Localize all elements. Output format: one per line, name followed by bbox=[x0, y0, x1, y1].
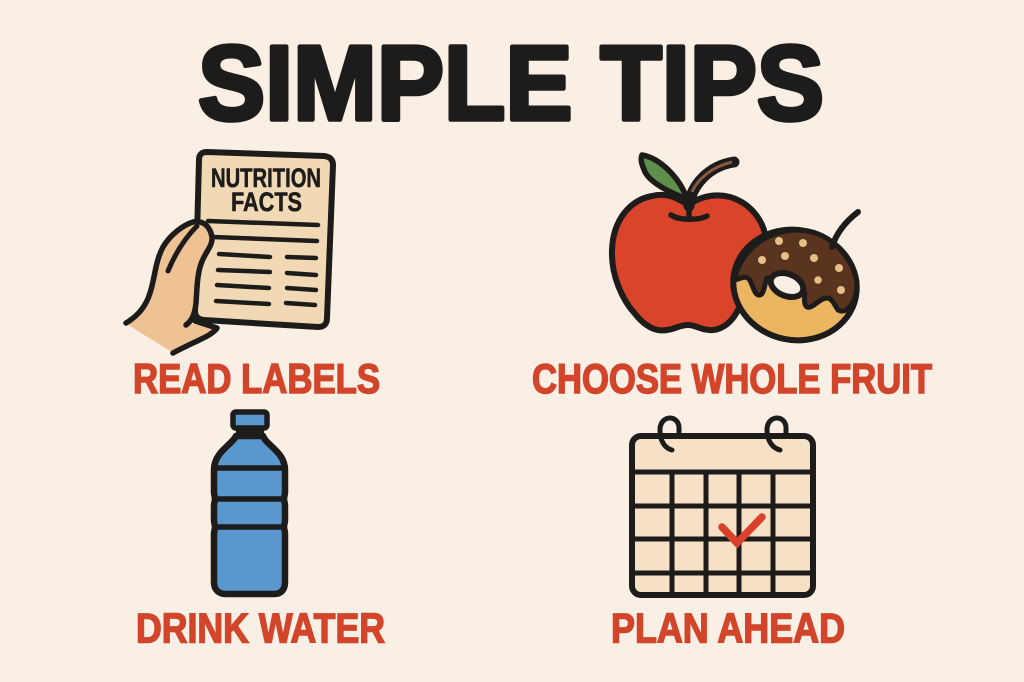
label: drink water: DRINK WATER bbox=[136, 604, 385, 652]
icon: nutrition label in hand: FACTS bbox=[231, 187, 302, 217]
label: read labels: READ LABELS bbox=[133, 355, 380, 402]
label: plan ahead: PLAN AHEAD bbox=[611, 604, 845, 652]
icon: water bottle bbox=[214, 412, 285, 594]
label: choose whole fruit: CHOOSE WHOLE FRUIT bbox=[532, 355, 932, 402]
icon: apple and donut bbox=[612, 155, 867, 352]
icon: nutrition label in hand bbox=[126, 152, 333, 353]
icon: nutrition label in hand: NUTRITION bbox=[211, 163, 321, 193]
title: SIMPLE TIPS bbox=[198, 24, 824, 142]
icon: calendar bbox=[632, 418, 813, 595]
